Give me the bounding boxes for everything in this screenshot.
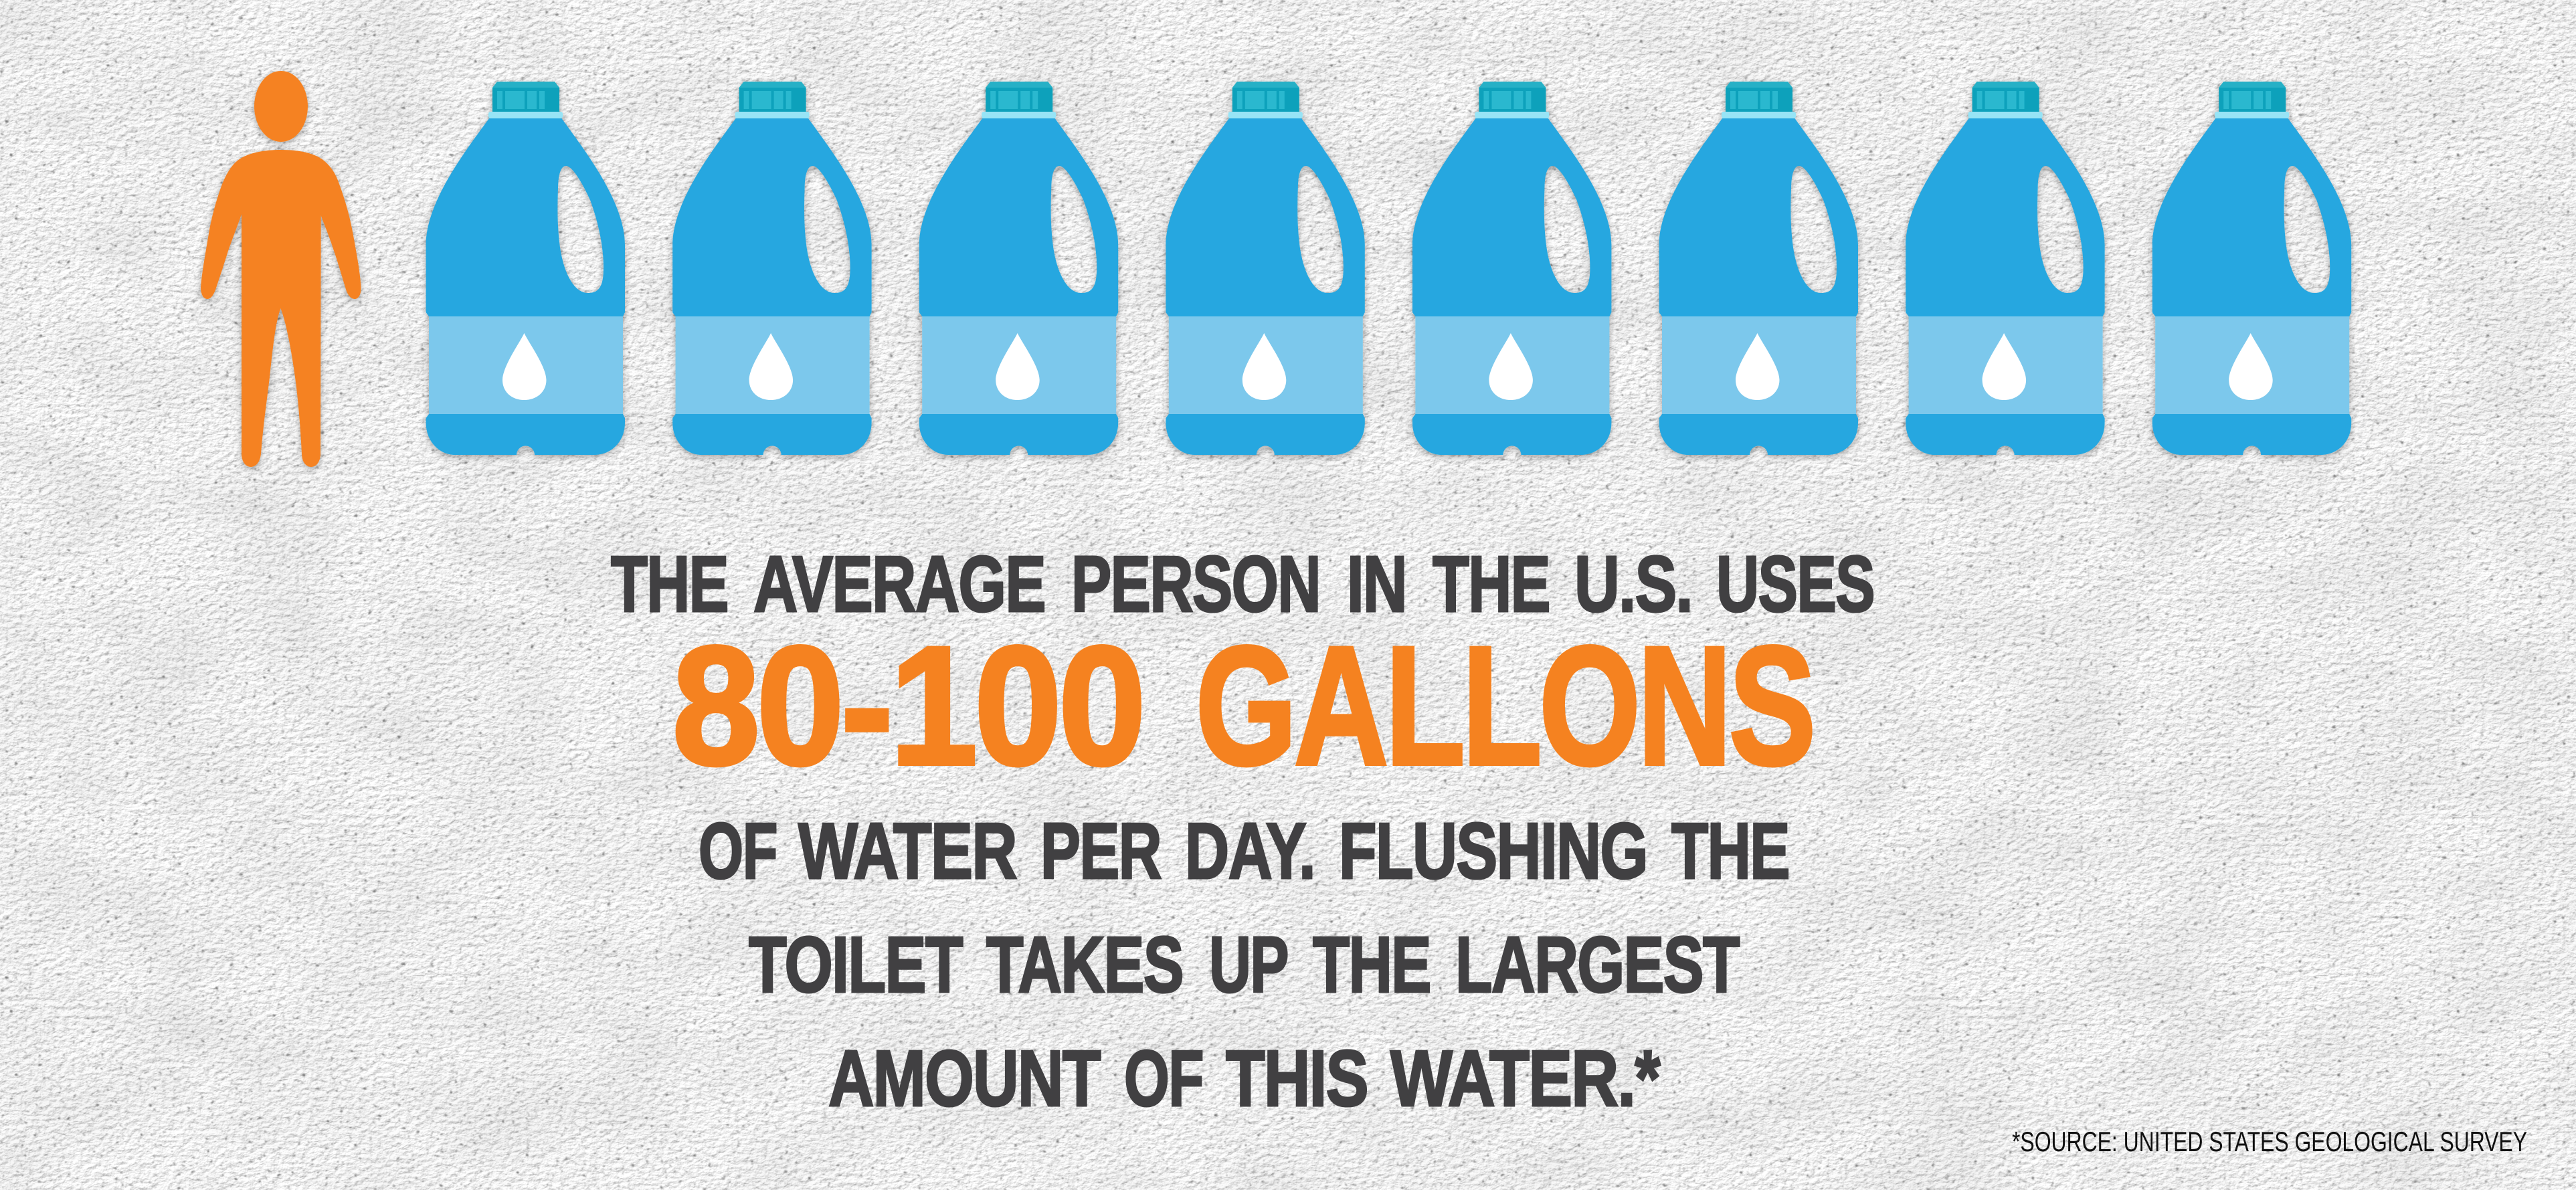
heading: key figure: 80-100 xyxy=(672,612,1143,800)
text block: body copy: THE xyxy=(1313,920,1431,1009)
text block: body copy: FLUSHING xyxy=(1339,807,1647,896)
heading: intro line: THE xyxy=(1433,540,1550,629)
heading: intro line: AVERAGE xyxy=(753,540,1045,629)
text block: body copy: TAKES xyxy=(986,920,1183,1009)
heading: key figure: GALLONS xyxy=(1196,612,1813,800)
icon: water jug 8 xyxy=(2152,82,2351,455)
heading: intro line: USES xyxy=(1716,540,1874,629)
text block: body copy: TOILET xyxy=(749,920,963,1009)
icon: orange person xyxy=(201,71,361,467)
text block: body copy: THE xyxy=(1671,807,1789,896)
heading: intro line xyxy=(611,540,1874,629)
heading: intro line: U.S. xyxy=(1574,540,1692,629)
text block: body copy: PER xyxy=(1040,807,1161,896)
icon: water jug 6 xyxy=(1659,82,1858,455)
icon: water jug 4 xyxy=(1166,82,1365,455)
text block: body copy: UP xyxy=(1209,920,1288,1009)
icon: water jug 3 xyxy=(919,82,1118,455)
icon: water jug 7 xyxy=(1906,82,2105,455)
icon: water jug 2 xyxy=(672,82,872,455)
text block: body copy: THIS xyxy=(1226,1034,1368,1123)
heading: key figure xyxy=(672,612,1813,800)
text block: body copy: OF xyxy=(699,807,777,896)
text block: body copy: AMOUNT xyxy=(828,1034,1101,1123)
text block: body copy: OF xyxy=(1124,1034,1203,1123)
text block: body copy: WATER xyxy=(798,807,1016,896)
icon: water jug 5 xyxy=(1412,82,1611,455)
icon: water jug 1 xyxy=(426,82,625,455)
heading: intro line: IN xyxy=(1347,540,1406,629)
text block: body copy xyxy=(699,807,1789,1123)
text block: body copy: WATER.* xyxy=(1390,1034,1661,1123)
heading: intro line: PERSON xyxy=(1071,540,1320,629)
text block: body copy: DAY. xyxy=(1185,807,1315,896)
heading: intro line: THE xyxy=(611,540,728,629)
text block: body copy: LARGEST xyxy=(1455,920,1740,1009)
